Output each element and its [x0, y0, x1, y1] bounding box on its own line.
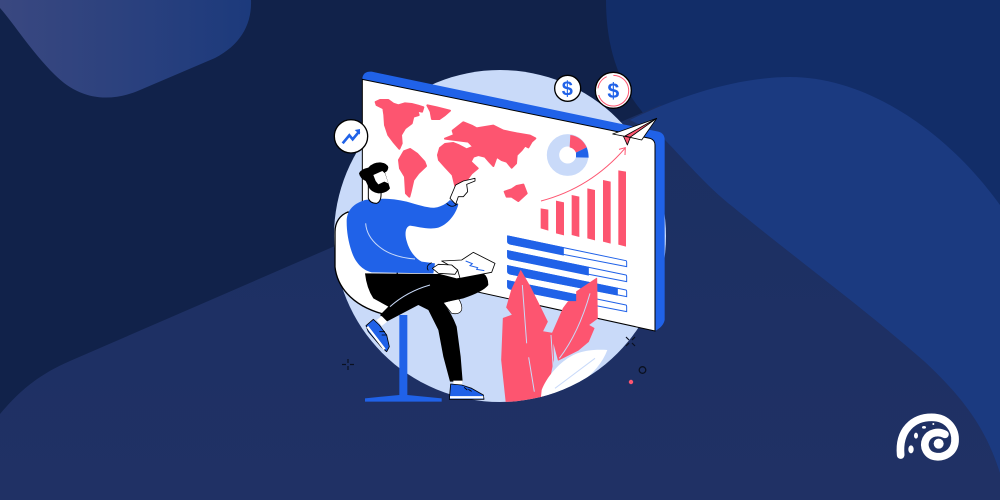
- Australia: [505, 185, 527, 201]
- background blob: top left: [0, 0, 251, 98]
- white leaf: [541, 350, 608, 397]
- ring dot: [639, 367, 646, 373]
- chair seat edge: [443, 298, 462, 314]
- planted shoe: [449, 384, 484, 399]
- left leaf: [502, 271, 553, 407]
- man upper body: [347, 162, 495, 278]
- hair and beard: [359, 162, 390, 193]
- raised shoe: [366, 319, 389, 352]
- sweater fold: [366, 223, 415, 259]
- man lower body: [365, 273, 488, 399]
- trouser highlight: [390, 285, 430, 307]
- progress row 1: [508, 236, 627, 267]
- bar chart: [541, 170, 626, 247]
- stool and chair: [365, 298, 462, 402]
- wrist line: [427, 263, 432, 270]
- logo: [900, 417, 955, 457]
- background blob: top right: [606, 0, 1000, 300]
- progress bars: [508, 236, 627, 312]
- donut chart: [553, 135, 589, 170]
- background blob: right: [630, 77, 1000, 473]
- trend arrow: [541, 148, 625, 201]
- resting hand: [432, 264, 458, 274]
- paper squiggle: [466, 261, 484, 271]
- world map: [376, 100, 535, 201]
- Eurasia and Africa: [438, 122, 535, 188]
- Greenland: [427, 105, 450, 119]
- white leaf vein: [555, 358, 595, 388]
- chair shell: [335, 212, 400, 314]
- sparkle right: [626, 337, 635, 346]
- raised sock: [377, 316, 387, 326]
- sweater: [347, 199, 458, 273]
- planted sock: [453, 381, 463, 386]
- stool: [365, 315, 442, 402]
- foreground leaves: [502, 271, 607, 407]
- icon: trend badge: [334, 120, 368, 153]
- progress row 2: [508, 251, 627, 282]
- progress row 4: [508, 281, 627, 312]
- coin: large dollar: $: [607, 79, 619, 103]
- trousers: [365, 273, 488, 382]
- North America: [376, 100, 423, 149]
- dashboard board: [362, 72, 665, 331]
- South America: [399, 149, 426, 197]
- board blue frame: [362, 72, 665, 331]
- background shape: bottom wave: [0, 105, 1000, 500]
- face: [373, 171, 388, 184]
- backdrop circle: [334, 70, 666, 402]
- leaf veins: [522, 285, 590, 392]
- board white face: [362, 79, 655, 331]
- paper plane: [613, 118, 657, 145]
- pointing hand: [450, 178, 475, 204]
- sparkle left: [342, 359, 354, 370]
- paper sheet: [442, 252, 495, 278]
- coin: small dollar: [555, 75, 581, 101]
- coin: small dollar: $: [562, 78, 573, 100]
- neck: [368, 185, 381, 203]
- red dot: [629, 380, 633, 384]
- coin: large dollar: [595, 72, 631, 108]
- right leaf: [552, 278, 597, 360]
- cuff line: [447, 203, 458, 206]
- progress row 3: [508, 266, 627, 297]
- floating badges: [334, 72, 657, 153]
